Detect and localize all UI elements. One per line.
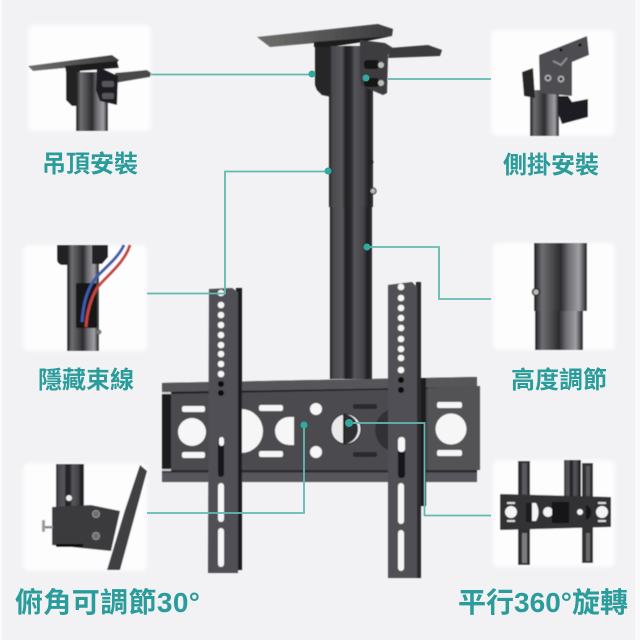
icon: right bracket	[360, 40, 393, 95]
icon: blue cable	[82, 245, 124, 322]
icon: top plate	[257, 24, 393, 47]
icon: left vertical rail	[208, 288, 242, 573]
labels	[15, 151, 628, 618]
icon: adjust knob	[532, 288, 540, 296]
label: parallel rotation: 平行360°旋轉	[458, 587, 628, 618]
icon: left cutouts	[178, 403, 322, 458]
connector dots	[300, 70, 370, 428]
connector: hidden cable	[147, 172, 328, 294]
panel: side mount detail	[491, 30, 615, 136]
panel: tilt detail	[23, 463, 147, 571]
icon: mini vertical rails	[518, 461, 593, 565]
icon: pipe	[564, 460, 581, 500]
connector: ceiling mount	[151, 74, 312, 76]
icon: knob	[42, 520, 53, 532]
icon: height knob	[368, 160, 376, 194]
icon: top bracket	[57, 245, 108, 265]
icon: upper pole	[329, 46, 373, 207]
icon: central pivot	[331, 404, 388, 457]
icon: left bracket	[66, 66, 80, 106]
icon: mini crossbar	[500, 494, 611, 530]
label: side mount: 側掛安裝	[503, 152, 599, 179]
icon: cable slot	[76, 283, 97, 328]
icon: right vertical rail	[388, 282, 426, 578]
icon: lower pole	[330, 207, 372, 379]
icon: rear arm	[388, 45, 442, 58]
icon: lower pipe	[535, 311, 583, 350]
icon: left clip	[522, 68, 535, 98]
icon: tilted plate	[107, 465, 147, 570]
label: hidden cable: 隱藏束線	[38, 367, 134, 394]
icon: pipe	[530, 90, 559, 136]
icon: crossbar	[162, 377, 480, 482]
connector lines	[147, 74, 491, 516]
icon: tilt block	[52, 505, 120, 551]
panel: hidden cable detail	[23, 245, 147, 351]
main product: ceiling TV mount	[162, 24, 480, 578]
icon: lower bracket	[558, 96, 588, 124]
label: ceiling mount: 吊頂安裝	[42, 151, 138, 178]
label: height adjustment: 高度調節	[511, 367, 607, 394]
icon: right bracket	[96, 66, 118, 105]
connector: rotation	[349, 423, 491, 516]
icon: pipe	[67, 245, 99, 351]
panel: height adjustment detail	[493, 243, 615, 350]
icon: red cable	[86, 245, 130, 327]
icon: knob	[96, 330, 102, 334]
icon: ceiling plate	[28, 55, 119, 72]
icon: left bracket	[315, 44, 332, 97]
label: tilt adjustable: 俯角可調節30°	[15, 587, 200, 618]
icon: right cutouts	[436, 402, 466, 456]
icon: pipe	[76, 72, 108, 131]
connector: height adjustment	[367, 247, 491, 299]
icon: pipe	[56, 464, 84, 508]
connector: side mount	[388, 78, 491, 80]
icon: upper pipe	[534, 243, 587, 311]
icon: wall plate	[539, 36, 589, 96]
icon: far arm	[115, 70, 151, 83]
panel: ceiling mount detail	[28, 25, 151, 131]
connector: tilt	[147, 425, 304, 513]
panel: rotation detail	[493, 460, 615, 567]
